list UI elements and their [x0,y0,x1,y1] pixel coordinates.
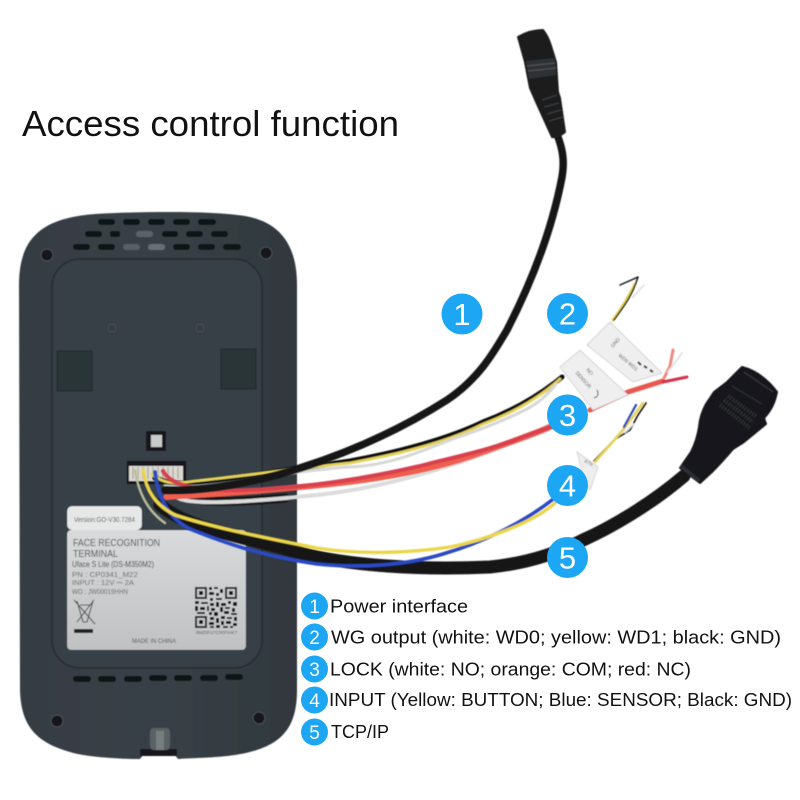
legend item 1: Power interface [330,596,468,616]
specification plate: TERMINAL [73,549,118,560]
tag: input wire [577,452,598,490]
tag: upper: WD0 WD1 [617,353,639,373]
badge: 2 [547,293,588,334]
QR code [195,587,237,635]
device back panel [19,212,297,759]
legend [301,592,792,746]
legend item 5 [301,718,389,746]
legend item 5: 5 [309,723,320,744]
badge: 5: 5 [559,540,576,576]
tag: upper: GND [610,337,622,349]
wire bundle: LOCK [163,350,687,502]
legend item 2 [301,624,781,650]
tag: lower: SENSOR [574,370,592,390]
inner recessed plate [52,259,262,668]
tag: lower: NO [585,367,594,377]
legend item 4: INPUT (Yellow: BUTTON; Blue: SENSOR; Black: GND) [329,689,792,710]
badge: 2: 2 [559,296,576,332]
tamper switch [146,431,166,451]
device body [19,212,297,759]
ethernet cable [160,476,684,568]
specification plate: Uface S Lite (DS-M350M2) [72,560,154,569]
bottom latch [140,728,177,756]
badge: 1: 1 [453,297,471,332]
badge: 4 [547,465,588,506]
version tab [67,506,142,530]
wire bundle: WG output [152,277,644,487]
RJ45 jack [680,367,777,483]
wire bundle: INPUT [135,403,646,523]
version tab: Version:GO-V30.7284 [74,517,135,524]
ethernet cable with RJ45 jack [143,367,777,568]
tag: lower [560,350,628,410]
ventilation slots top [73,219,241,250]
badge: 3: 3 [559,398,576,433]
legend item 3 [301,656,691,682]
label sticker [67,506,246,650]
tag: upper [587,322,662,382]
tag: input wire: BTN [584,459,594,467]
mounting windows [57,324,256,391]
DC jack [518,30,565,137]
legend item 1: 1 [309,597,320,618]
specification plate: MADE IN CHINA [132,638,177,645]
specification plate: PN : CP0341_M22 [72,572,138,579]
specification plate: INPUT : 12V ⎓ 2A [72,580,134,587]
QR code: 8MZ0FU7CR0FIAK7 [196,630,237,635]
legend item 2: 2 [309,628,320,649]
legend item 2: WG output (white: WD0; yellow: WD1; black: GND) [331,626,781,648]
wire tags [560,322,662,490]
specification plate: WO : JW00019HHN [72,589,128,596]
power cable with DC jack [165,30,565,490]
legend item 3: 3 [309,660,320,681]
specification plate: FACE RECOGNITION [73,538,160,549]
badge: 5 [547,537,588,578]
legend item 4: 4 [309,691,320,712]
badge: 3 [547,394,588,436]
terminal connector [127,461,186,484]
screws [41,247,272,727]
ventilation slots bottom [73,674,243,682]
power cable [165,137,563,490]
legend item 5: TCP/IP [331,721,389,742]
legend item 1 [301,592,468,620]
title: Access control function [22,103,399,144]
icon: crossed-out bin [74,600,95,633]
specification plate [67,530,246,650]
badge: 1 [442,294,482,334]
badge: 4: 4 [559,468,576,504]
legend item 3: LOCK (white: NO; orange: COM; red: NC) [330,658,691,680]
